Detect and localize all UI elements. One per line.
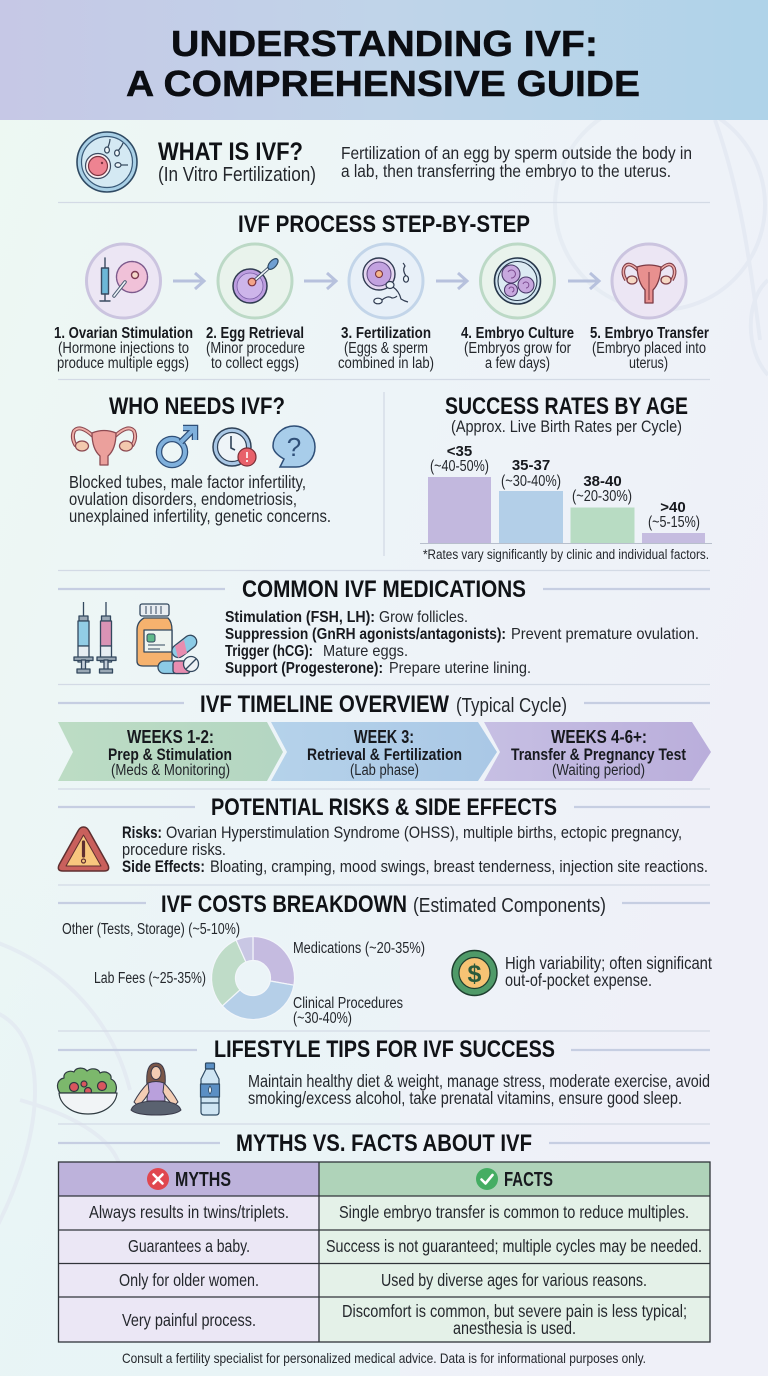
section: myths vs facts <box>58 1130 710 1342</box>
text: who needs IVF <box>69 472 331 526</box>
step labels: (Embryo placed into <box>592 340 706 357</box>
risks text: procedure risks. <box>122 840 226 859</box>
heading: process: IVF PROCESS STEP-BY-STEP <box>238 211 530 238</box>
risks text: Risks: <box>122 823 162 842</box>
timeline stage 2 <box>271 722 497 781</box>
timeline stage 3: (Waiting period) <box>552 762 645 779</box>
footnote: *Rates vary significantly by clinic and individual factors. <box>423 547 709 562</box>
heading: myths vs facts: MYTHS VS. FACTS ABOUT IVF <box>236 1130 532 1157</box>
icon: salad bowl <box>57 1068 117 1114</box>
section: common medications <box>58 576 710 677</box>
definition text: a lab, then transferring the embryo to the uterus. <box>341 161 671 181</box>
bar chart: 35-37 <box>512 457 550 474</box>
row 1: Always results in twins/triplets. <box>89 1202 289 1222</box>
panel: who needs IVF <box>69 393 331 526</box>
step labels: (Eggs & sperm <box>344 340 428 357</box>
donut chart <box>212 936 295 1020</box>
row 3 <box>119 1270 647 1290</box>
footer disclaimer: Consult a fertility specialist for personalized medical advice. Data is for informational purposes only. <box>122 1350 646 1366</box>
row 4: Very painful process. <box>122 1310 256 1330</box>
icon: question bubble <box>273 426 315 467</box>
step labels: 2. Egg Retrieval <box>206 325 304 342</box>
section: what is IVF <box>77 132 692 192</box>
step labels: (Minor procedure <box>206 340 305 357</box>
bar chart: (~30-40%) <box>501 473 561 490</box>
title: UNDERSTANDING IVF: <box>171 23 598 64</box>
bar chart <box>420 443 712 544</box>
arrow <box>173 273 204 289</box>
donut labels <box>62 921 425 1027</box>
icon: uterus <box>73 428 135 465</box>
medication list: Prevent premature ovulation. <box>511 626 699 643</box>
step labels: combined in lab) <box>338 355 434 372</box>
row 4: anesthesia is used. <box>453 1318 576 1338</box>
icon: petri dish with egg and sperm <box>77 132 137 192</box>
medication list: Mature eggs. <box>323 643 408 660</box>
step labels: to collect eggs) <box>211 355 299 372</box>
medication list: Trigger (hCG): <box>225 643 313 660</box>
lifestyle text: smoking/excess alcohol, take prenatal vitamins, ensure good sleep. <box>248 1088 682 1108</box>
heading: who needs IVF: WHO NEEDS IVF? <box>109 393 285 420</box>
definition text <box>341 143 692 181</box>
heading: costs: IVF COSTS BREAKDOWN <box>161 891 407 918</box>
risks text: Ovarian Hyperstimulation Syndrome (OHSS), multiple births, ectopic pregnancy, <box>166 823 682 842</box>
timeline stage 3: Transfer & Pregnancy Test <box>511 745 686 764</box>
row 3: Used by diverse ages for various reasons. <box>381 1270 647 1290</box>
text: who needs IVF: ovulation disorders, endometriosis, <box>69 489 297 509</box>
heading: timeline: IVF TIMELINE OVERVIEW <box>200 691 450 718</box>
icon: male symbol <box>159 428 195 465</box>
heading: costs: (Estimated Components) <box>413 895 606 917</box>
step labels: 1. Ovarian Stimulation <box>54 325 193 342</box>
row 1 <box>89 1202 689 1222</box>
heading: lifestyle: LIFESTYLE TIPS FOR IVF SUCCESS <box>214 1036 555 1063</box>
definition text: Fertilization of an egg by sperm outside the body in <box>341 143 692 163</box>
step 2: egg retrieval <box>218 244 292 318</box>
arrow <box>568 273 599 289</box>
header band <box>0 0 768 120</box>
row 1: Single embryo transfer is common to reduce multiples. <box>339 1202 689 1222</box>
bar chart: (~5-15%) <box>648 514 700 531</box>
medication list: Support (Progesterone): <box>225 660 383 677</box>
icon: water bottle <box>200 1063 220 1115</box>
bar chart: (~20-30%) <box>572 488 632 505</box>
step labels: produce multiple eggs) <box>57 355 189 372</box>
step labels <box>54 325 709 372</box>
timeline stage 3 <box>484 722 711 781</box>
heading: success rates: SUCCESS RATES BY AGE <box>445 393 688 420</box>
step 4: embryo culture <box>480 244 554 318</box>
cost note <box>505 953 712 990</box>
step labels: (Embryos grow for <box>464 340 571 357</box>
step 3: fertilization <box>349 244 423 318</box>
timeline stage 2: WEEK 3: <box>354 726 414 747</box>
icon: pill bottle and capsules <box>137 604 199 674</box>
timeline stage 1 <box>58 722 283 781</box>
medication list: Grow follicles. <box>379 609 468 626</box>
medication list: Suppression (GnRH agonists/antagonists): <box>225 626 506 643</box>
icon: syringes <box>74 602 116 673</box>
step labels: 3. Fertilization <box>341 325 431 342</box>
title: A COMPREHENSIVE GUIDE <box>126 63 640 104</box>
bar chart: (~40-50%) <box>430 458 489 475</box>
bar chart: <35 <box>447 443 472 460</box>
cost note: High variability; often significant <box>505 953 712 973</box>
icon: warning triangle <box>58 827 109 871</box>
donut labels: Clinical Procedures <box>293 995 403 1012</box>
row 3: Only for older women. <box>119 1270 259 1290</box>
arrow <box>304 273 336 289</box>
timeline stage 2: Retrieval & Fertilization <box>307 745 462 764</box>
medication list: Stimulation (FSH, LH): <box>225 609 375 626</box>
donut labels: Medications (~20-35%) <box>293 940 425 957</box>
icon: dollar coin: $ <box>468 960 482 988</box>
heading: timeline: (Typical Cycle) <box>456 695 567 717</box>
lifestyle text <box>248 1071 710 1108</box>
icon: clock with alert <box>213 428 256 466</box>
bar chart: >40 <box>660 499 686 516</box>
section: risks and side effects <box>58 794 710 876</box>
heading: costs <box>161 891 606 918</box>
row 4 <box>122 1301 687 1338</box>
step 5: embryo transfer <box>612 244 686 318</box>
myths header: MYTHS <box>175 1169 231 1191</box>
donut labels: Other (Tests, Storage) (~5-10%) <box>62 921 240 938</box>
risks text: Side Effects: <box>122 857 205 876</box>
step labels: a few days) <box>485 355 550 372</box>
facts header: FACTS <box>504 1169 553 1191</box>
step labels: (Hormone injections to <box>58 340 189 357</box>
row 4: Discomfort is common, but severe pain is less typical; <box>342 1301 687 1321</box>
arrow <box>436 273 467 289</box>
step labels: 4. Embryo Culture <box>461 325 574 342</box>
text: who needs IVF: Blocked tubes, male factor infertility, <box>69 472 306 492</box>
section: IVF process <box>54 211 709 372</box>
icon: meditating woman <box>131 1063 181 1115</box>
subheading: live birth rates: (Approx. Live Birth Rates per Cycle) <box>451 417 682 436</box>
row 2 <box>128 1236 702 1256</box>
section: timeline overview <box>58 691 711 781</box>
donut labels: (~30-40%) <box>293 1010 352 1027</box>
myths header <box>147 1168 231 1191</box>
icon: dollar coin <box>452 950 497 996</box>
subheading: in vitro fertilization: (In Vitro Fertilization) <box>158 164 316 186</box>
panel: success rates by age <box>420 393 712 562</box>
risks text <box>122 823 708 876</box>
timeline stage 2: (Lab phase) <box>350 762 419 779</box>
step labels: uterus) <box>629 355 668 372</box>
step 1: ovarian stimulation <box>86 244 160 318</box>
row 2: Guarantees a baby. <box>128 1236 250 1256</box>
section: costs breakdown <box>58 891 712 1027</box>
cost note: out-of-pocket expense. <box>505 970 652 990</box>
timeline stage 1: (Meds & Monitoring) <box>111 762 230 779</box>
table <box>58 1162 710 1342</box>
step labels: 5. Embryo Transfer <box>590 325 709 342</box>
timeline stage 1: Prep & Stimulation <box>108 745 232 764</box>
facts header <box>476 1168 553 1191</box>
donut labels: Lab Fees (~25-35%) <box>94 970 206 987</box>
timeline stage 1: WEEKS 1-2: <box>127 726 214 747</box>
heading: risks: POTENTIAL RISKS & SIDE EFFECTS <box>211 794 557 821</box>
medication list <box>225 609 699 677</box>
timeline stage 3: WEEKS 4-6+: <box>551 726 647 747</box>
heading: what is IVF: WHAT IS IVF? <box>158 138 303 166</box>
heading: medications: COMMON IVF MEDICATIONS <box>242 576 526 603</box>
section: lifestyle tips <box>57 1036 710 1115</box>
bar chart: 38-40 <box>583 473 622 490</box>
text: who needs IVF: unexplained infertility, genetic concerns. <box>69 506 331 526</box>
icon: question bubble: ? <box>287 432 301 462</box>
title <box>126 23 640 104</box>
medication list: Prepare uterine lining. <box>389 660 531 677</box>
